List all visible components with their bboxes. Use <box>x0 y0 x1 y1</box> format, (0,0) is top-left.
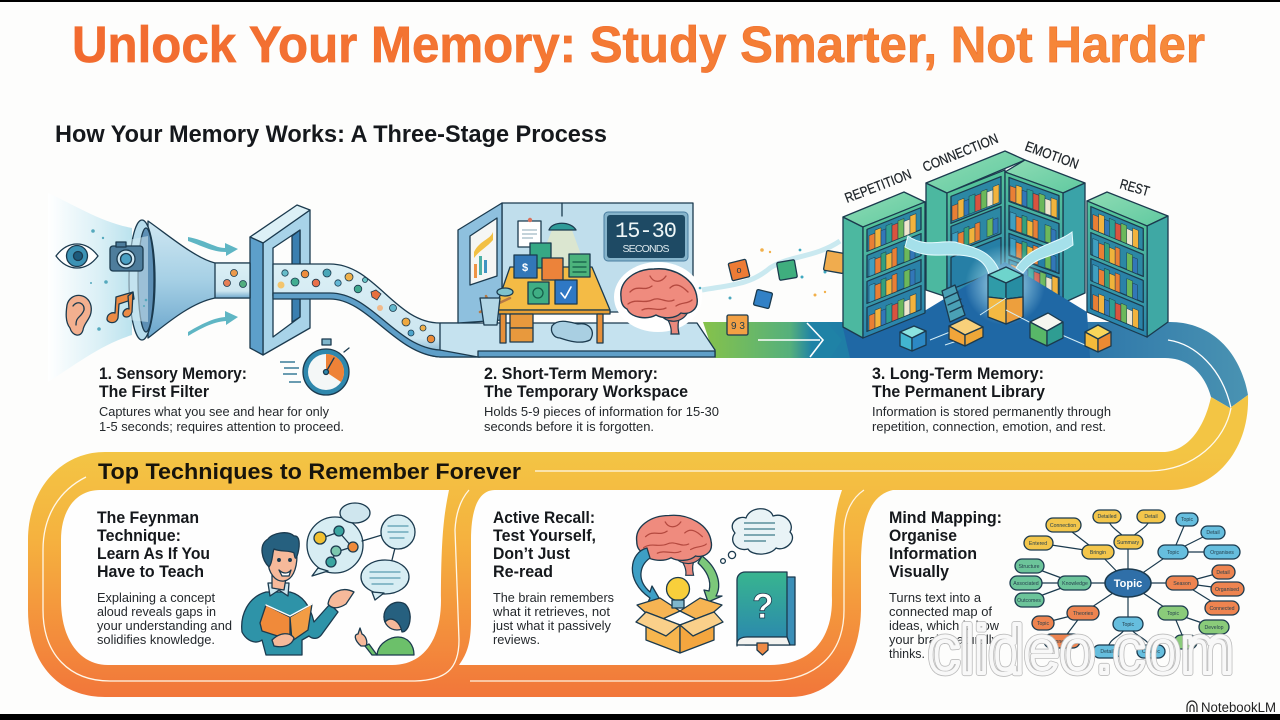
labels: library pillars: EMOTION <box>1023 138 1081 172</box>
chart: mind map: Connection <box>1050 523 1076 529</box>
icon: pinned note <box>518 218 541 247</box>
heading: Feynman: Have to Teach <box>97 563 204 581</box>
text: stage 1: 1. Sensory Memory: <box>99 365 247 383</box>
text: Mind Mapping description: your brain naturally <box>889 633 999 647</box>
icon: flying memory blocks: o <box>736 265 742 275</box>
chart: mind map: Topic <box>1037 621 1049 627</box>
chart: mind map: Organised <box>1215 587 1239 593</box>
heading: Active Recall: Active Recall: <box>493 509 595 527</box>
chart: mind map: Bringin <box>1090 550 1106 556</box>
arrow: upper flow <box>188 237 238 256</box>
text: stage 3: repetition, connection, emotion, and rest. <box>872 420 1106 434</box>
icon: teacher with book <box>242 503 415 655</box>
labels: library pillars <box>842 130 1152 206</box>
icon: clock display: 15-30 <box>615 219 677 244</box>
icon: floor cubes <box>900 313 1111 352</box>
chart: mind map: Entered <box>1029 541 1047 547</box>
text: Mind Mapping description: connected map of <box>889 605 993 619</box>
text: stage 3 <box>872 365 1111 434</box>
chart: mind map: Detail <box>1144 514 1158 520</box>
icon: question book <box>737 572 795 655</box>
panel: Mind Mapping <box>889 509 1244 661</box>
text: stage 2: seconds before it is forgotten. <box>484 420 654 434</box>
text: Active Recall description <box>492 591 614 647</box>
heading: Feynman: Learn As If You <box>97 545 210 563</box>
chart: mind map: Knowledge <box>1062 581 1088 587</box>
heading: Feynman: Technique: <box>97 527 181 545</box>
logo: NotebookLM: NotebookLM <box>1201 700 1276 715</box>
text: Mind Mapping description: Turns text into a <box>889 591 981 605</box>
labels: library pillars: REST <box>1118 176 1152 199</box>
icon: clock display: SECONDS <box>622 243 670 255</box>
icon: flying memory blocks <box>699 241 847 335</box>
text: Mind Mapping description: thinks. <box>889 647 925 661</box>
heading: Mind Mapping: Mind Mapping: <box>889 509 1002 527</box>
chart: mind map: Detail <box>1100 649 1114 655</box>
text: stage 3: Information is stored permanently through <box>872 405 1111 419</box>
panel: bookshelf Emotion <box>1005 160 1085 303</box>
illustration: sensory spray <box>48 193 132 382</box>
text: Mind Mapping description <box>889 591 1000 661</box>
heading: Active Recall <box>493 509 596 581</box>
watermark: clideo: clideo.com <box>928 611 1234 687</box>
icon: stopwatch <box>280 339 349 395</box>
icon: workspace brain <box>614 262 702 334</box>
chart: mind map: Organises <box>1210 550 1234 556</box>
text: stage 2 <box>484 365 719 434</box>
arrow: lower flow <box>188 311 238 336</box>
text: stage 3: The Permanent Library <box>872 383 1046 401</box>
heading: three-stage process: How Your Memory Works: A Three-Stage Process <box>55 121 607 148</box>
text: stage 1: Captures what you see and hear for only <box>99 405 330 419</box>
panel: bookshelf Connection <box>926 151 1025 298</box>
text: Feynman description: your understanding and <box>97 619 232 633</box>
chart: mind map: Detailed <box>1097 514 1117 520</box>
text: Active Recall description: reviews. <box>493 633 540 647</box>
text: Active Recall description: what it retrieves, not <box>492 605 611 619</box>
icon: music note <box>107 292 134 323</box>
icon: blocks on desk <box>514 243 590 304</box>
chart: mind map: Structure <box>1018 564 1040 570</box>
heading: Active Recall: Re-read <box>493 563 553 581</box>
panel: bookshelf Rest <box>1087 192 1168 337</box>
chart: mind map: Connection <box>1049 639 1075 645</box>
chart: mind map: Summary <box>1117 540 1139 546</box>
labels: library pillars: CONNECTION <box>920 130 1000 175</box>
icon: dots in spray <box>90 229 147 331</box>
panel: short-term workspace platform <box>440 323 715 357</box>
panel: workspace walls <box>458 203 693 323</box>
text: stage 2: 2. Short-Term Memory: <box>484 365 658 383</box>
icon: flying memory blocks: 9 3 <box>731 321 745 332</box>
panel: Feynman card <box>61 490 449 665</box>
icon: clock display <box>604 212 688 261</box>
icon: camera <box>110 242 143 271</box>
icon: pen cup <box>480 288 513 325</box>
heading: Feynman: The Feynman <box>97 509 199 527</box>
labels: library pillars: REPETITION <box>842 166 913 206</box>
panel: Active Recall card <box>459 490 842 665</box>
heading: Active Recall: Don’t Just <box>493 545 570 563</box>
chart: mind map: Associated <box>1013 581 1039 587</box>
icon: question book: ? <box>752 587 774 626</box>
heading: techniques: Top Techniques to Remember Forever <box>98 459 521 484</box>
text: Feynman description: solidifies knowledge. <box>97 633 215 647</box>
text: stage 2: Holds 5-9 pieces of information for 15-30 <box>484 405 719 419</box>
panel: flow band from short-term to long-term <box>703 322 1248 408</box>
icon: ladder <box>942 285 965 322</box>
heading: Active Recall: Test Yourself, <box>493 527 596 545</box>
heading: Mind Mapping: Organise <box>889 527 957 545</box>
text: stage 3: 3. Long-Term Memory: <box>872 365 1044 383</box>
chart: mind map: Connected <box>1209 606 1235 612</box>
text: Active Recall description: The brain remembers <box>493 591 614 605</box>
chart: mind map: Topic <box>1167 550 1179 556</box>
panel: techniques band <box>28 395 1248 697</box>
icon: wall chart <box>474 232 493 278</box>
panel: floor of library <box>843 262 1090 358</box>
heading: Mind Mapping: Visually <box>889 563 950 581</box>
chart: mind map: Topic <box>1122 622 1134 628</box>
chart: mind map: Season <box>1173 581 1191 587</box>
icon: central glowing cubes and streams <box>905 232 1085 345</box>
icon: particles in pipe <box>224 269 435 343</box>
icon: eye <box>56 244 98 268</box>
icon: gate <box>250 205 310 355</box>
icon: brain with lightbulb box <box>632 515 723 653</box>
heading: Mind Mapping <box>889 509 1002 581</box>
chart: mind map: Detail <box>1216 570 1230 576</box>
heading: Mind Mapping: Information <box>889 545 977 563</box>
chart: mind map <box>1010 510 1244 658</box>
watermark: clideo: clideo.com <box>928 611 1234 687</box>
text: stage 1: 1-5 seconds; requires attention to proceed. <box>99 420 344 434</box>
title: Unlock Your Memory: Study Smarter, Not Harder <box>72 16 1205 73</box>
icon: blocks on desk: $ <box>522 262 528 274</box>
text: stage 1: The First Filter <box>99 383 210 401</box>
text: Feynman description <box>97 591 232 647</box>
panel: bookshelf Repetition <box>843 192 925 338</box>
text: stage 1 <box>99 365 344 434</box>
chart: mind map: Topic <box>1114 578 1142 590</box>
chart: mind map: Topic <box>1181 517 1193 523</box>
chart: mind map: Detail <box>1206 530 1220 536</box>
icon: funnel with pipe <box>128 220 480 357</box>
heading: Feynman <box>97 509 210 581</box>
chart: mind map: Connec <box>1142 649 1160 655</box>
text: Feynman description: aloud reveals gaps in <box>97 605 216 619</box>
chart: mind map: Outcomes <box>1017 598 1041 604</box>
text: Mind Mapping description: ideas, which is how <box>889 619 1000 633</box>
icon: desk <box>495 267 610 343</box>
icon: papers under desk <box>551 321 592 342</box>
text: stage 2: The Temporary Workspace <box>484 383 688 401</box>
icon: hanging lamp <box>530 203 592 285</box>
icon: ear <box>66 295 91 335</box>
text: Feynman description: Explaining a concept <box>97 591 216 605</box>
text: Active Recall description: just what it passively <box>492 619 612 633</box>
chart: mind map: Develop <box>1204 625 1224 631</box>
chart: mind map: Topic <box>1167 611 1179 617</box>
icon: thought cloud <box>721 509 792 563</box>
chart: mind map: Theories <box>1073 611 1093 617</box>
